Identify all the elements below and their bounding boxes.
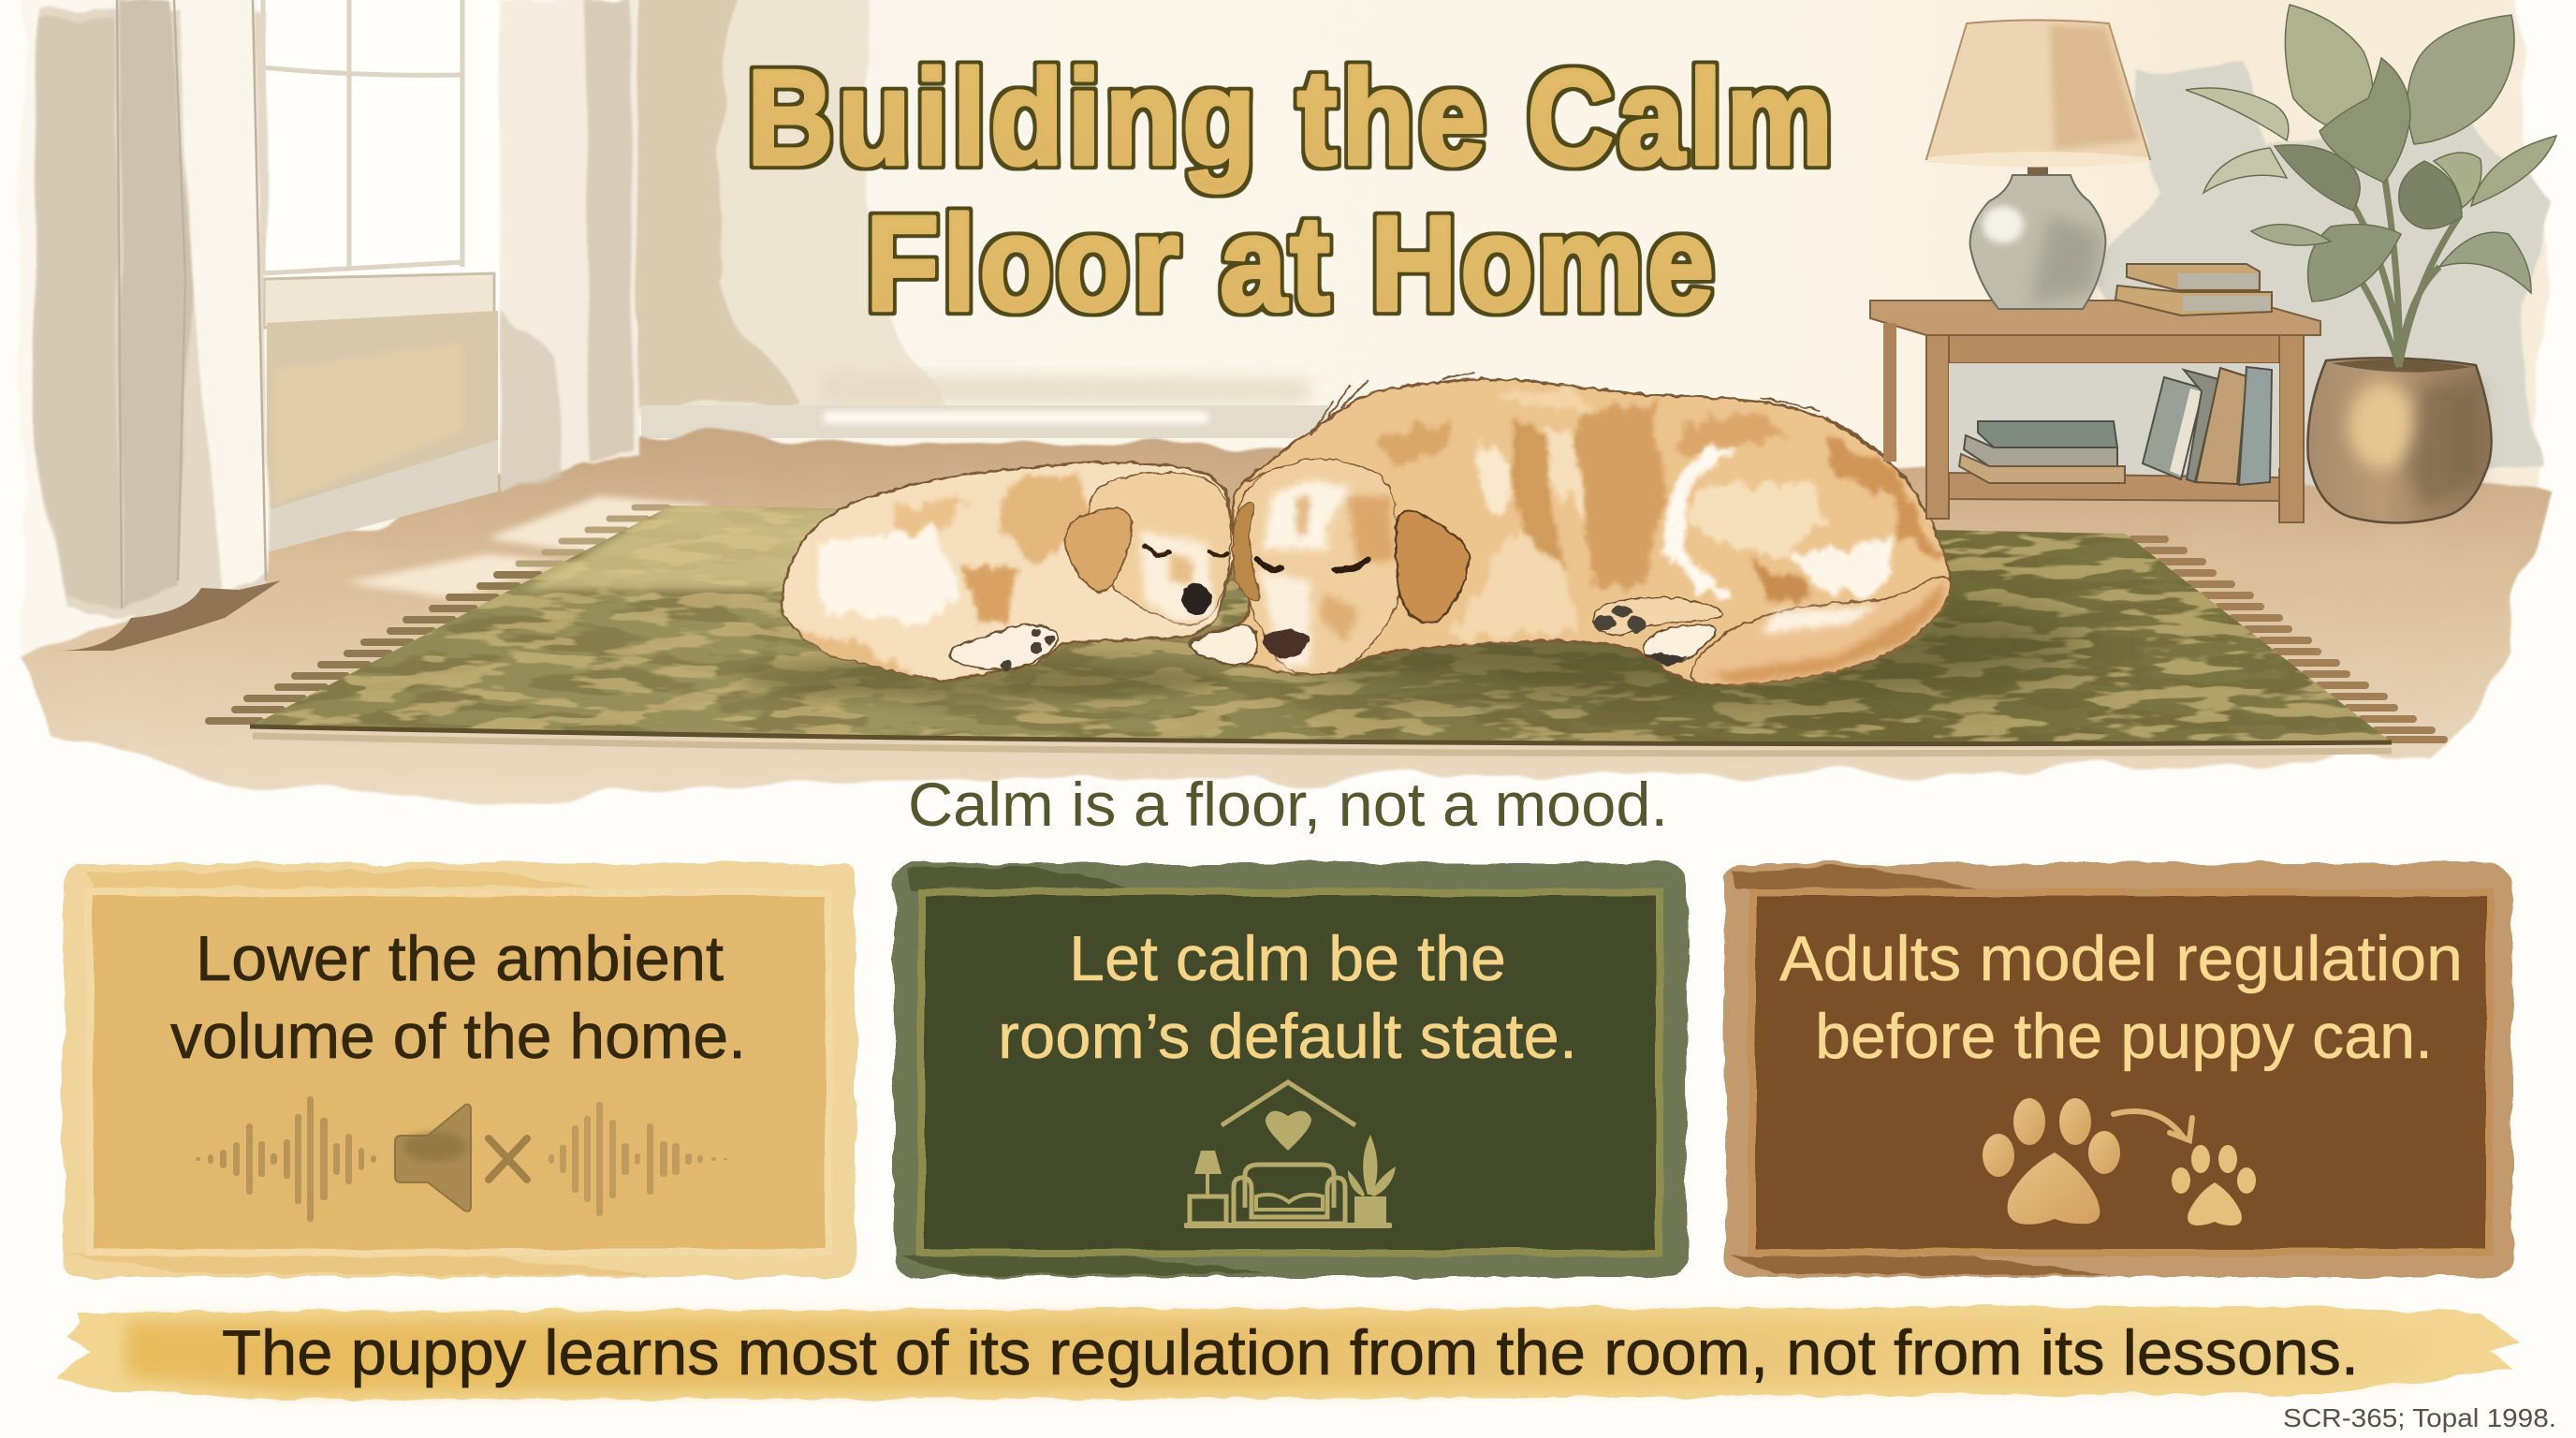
baseboard <box>641 405 1329 438</box>
banner brush stroke <box>56 1307 2518 1400</box>
icon: small paw <box>2172 1145 2256 1225</box>
panel text <box>998 923 1577 1072</box>
side table <box>1870 301 2320 522</box>
plant <box>2186 5 2556 367</box>
grey wash behind plant <box>2087 66 2551 496</box>
source footnote: SCR-365; Topal 1998. <box>2283 1403 2556 1432</box>
panel text: Adults model regulation <box>1779 923 2463 994</box>
puppy head <box>1089 473 1231 624</box>
adult second paw <box>1643 625 1717 665</box>
rug fringe <box>209 507 2444 740</box>
adult right ear <box>1396 511 1469 623</box>
adult golden retriever <box>1191 373 1951 684</box>
puppy fur markings <box>791 473 1095 682</box>
floor sunlight patches <box>346 496 711 599</box>
panel background <box>64 863 856 1277</box>
panel text: volume of the home. <box>170 1001 746 1072</box>
puppy ear <box>1065 508 1132 592</box>
adult tail <box>1691 576 1951 684</box>
title: Building the Calm <box>747 42 1833 193</box>
icon: large paw <box>1983 1098 2120 1225</box>
panel text: room’s default state. <box>998 1001 1577 1072</box>
wall shadow band <box>824 374 1310 403</box>
panel background <box>894 863 1687 1277</box>
window <box>257 0 499 552</box>
illustration: living room scene <box>21 0 2556 805</box>
adult head <box>1237 459 1401 674</box>
puppy <box>781 462 1236 682</box>
title: Floor at Home <box>866 188 1714 339</box>
panel background <box>1725 863 2512 1277</box>
icon: sound waves right <box>549 1102 727 1216</box>
panel text <box>1779 923 2463 1072</box>
panel: calm default state <box>894 863 1687 1277</box>
panel text: Let calm be the <box>1069 923 1506 994</box>
adult hind paw <box>1592 597 1722 636</box>
rug <box>249 506 2392 756</box>
tan wall shade at corner <box>637 0 805 404</box>
adult front paw <box>1192 625 1257 665</box>
adult left ear <box>1233 503 1259 600</box>
wall wash <box>21 0 2551 655</box>
puppy nose <box>1182 583 1210 615</box>
table lamp <box>1926 21 2150 309</box>
plant pot <box>2307 358 2492 522</box>
panel: adults model regulation <box>1725 863 2512 1277</box>
panel text: Lower the ambient <box>196 923 724 994</box>
pale wall tint near corner <box>637 0 945 412</box>
icon: sound waves left <box>196 1096 376 1222</box>
banner text: The puppy learns most of its regulation from the room, not from its lessons. <box>222 1317 2359 1388</box>
icon: muted speaker <box>395 1105 527 1211</box>
banner: key takeaway <box>56 1307 2518 1400</box>
left curtain <box>33 0 281 651</box>
adult eyes <box>1257 559 1368 570</box>
puppy body <box>781 462 1236 682</box>
books on shelf <box>1959 367 2272 485</box>
adult fur markings <box>1376 390 1940 639</box>
panel text: before the puppy can. <box>1815 1001 2433 1072</box>
title <box>747 42 1833 339</box>
puppy paw <box>949 624 1057 670</box>
right curtain <box>501 0 639 492</box>
floor wash <box>23 436 2555 805</box>
panel text <box>170 923 746 1072</box>
adult body <box>1191 379 1951 684</box>
arrow: adult to puppy <box>2114 1111 2192 1140</box>
panel: lower ambient volume <box>64 863 856 1277</box>
books on table <box>2115 264 2272 315</box>
puppy eyes <box>1145 546 1227 556</box>
adult fur tufts <box>1245 373 1886 482</box>
subtitle: Calm is a floor, not a mood. <box>908 770 1668 839</box>
adult nose <box>1264 629 1309 658</box>
icon: home with heart and sofa <box>1184 1082 1396 1228</box>
